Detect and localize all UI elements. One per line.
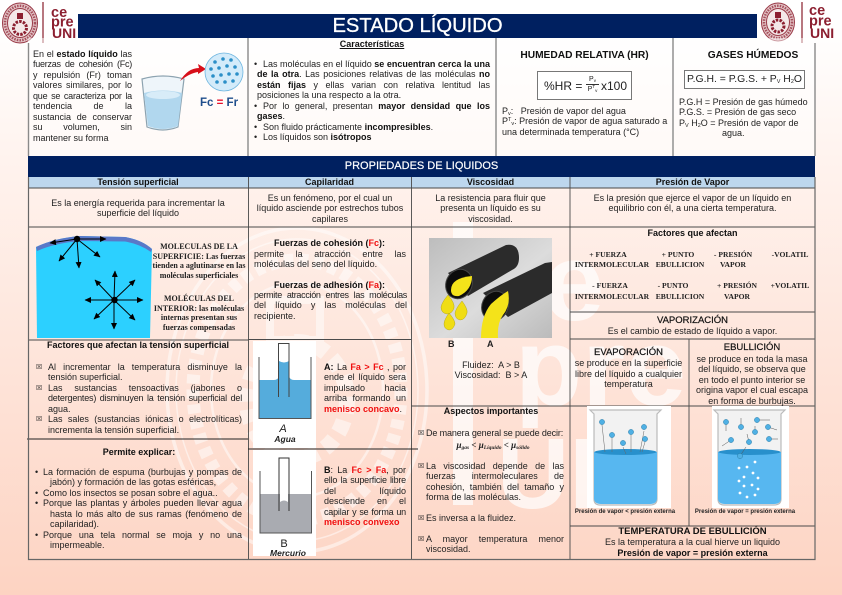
evaporación — [575, 346, 682, 389]
text: • — [254, 59, 257, 69]
list: permite explicar — [35, 467, 242, 550]
panel: humedad relativa — [502, 50, 668, 137]
text: • — [254, 101, 257, 111]
factors table: INTERMOLECULAR — [575, 292, 649, 301]
interior molecules note: INTERIOR: las moléculas — [154, 304, 244, 313]
fuerzas de adhesión text: del líquido y las moléculas del — [254, 300, 407, 310]
intro text: y repulsión (Fr) toman — [33, 70, 132, 80]
formula: HR: x100 — [601, 79, 627, 93]
viscosidad description: La resistencia para fluir que — [435, 193, 546, 203]
ebullición: se produce en toda la masa — [696, 354, 808, 364]
presión description: Es la presión que ejerce el vapor de un líquido en — [594, 193, 791, 203]
fluidez y viscosidad: Fluidez: A > B — [462, 360, 520, 370]
list: permite explicar: La formación de espuma (burbujas y pompas de — [43, 467, 242, 477]
bullet: viscosidad depende: ☒ — [418, 462, 424, 470]
fuerzas de adhesión text: permite atracción entres las moléculas — [254, 290, 407, 300]
temperatura de ebullición: Es la temperatura a la cual hierve un liquido — [605, 537, 780, 547]
evaporación: se produce en la superficie — [575, 358, 682, 368]
text: menisco convexo: capilar y se forma un — [324, 507, 406, 517]
list: permite explicar: hasta lo más alto de sus ramas (fenómeno de — [50, 509, 242, 519]
text: menisco convexo — [324, 465, 406, 527]
bullet: viscosidad depende: fuerzas intermoleculares de — [426, 471, 564, 481]
factors table — [575, 250, 809, 301]
capilaridad description: líquido asciende por estrechos tubos — [257, 203, 403, 213]
fuerzas de cohesión heading: Fuerzas de cohesión (Fc): — [274, 238, 385, 248]
factors table: INTERMOLECULAR — [575, 260, 649, 269]
interior molecules note — [154, 294, 244, 332]
col header: capilaridad: Capilaridad — [305, 177, 354, 187]
col header: viscosidad: Viscosidad — [467, 177, 514, 187]
surface molecules note: SUPERFICIE: Las fuerzas — [153, 252, 245, 261]
logo right: pre — [809, 14, 832, 30]
watermark: UNI — [497, 418, 669, 530]
list: características: posiciones la una respecto a la otra. — [257, 90, 401, 100]
label: A: A — [487, 339, 494, 349]
capilaridad description — [257, 193, 403, 224]
ebullición: origina vapor el cual escapa — [696, 385, 808, 395]
bullet: comparación: μgas < μLíquido < μsólido — [456, 440, 530, 451]
temperatura de ebullición — [605, 526, 780, 558]
fuerzas de adhesión text — [254, 290, 407, 321]
evaporación: EVAPORACIÓN — [594, 347, 663, 358]
panel: gases húmedos — [679, 48, 808, 138]
bullet: comparación: ☒ — [418, 429, 424, 437]
vaporización: Es el cambio de estado de líquido a vapor. — [608, 326, 777, 336]
list: factores tensión: Las sales (sustancias iónicas o electrolíticas) — [48, 414, 242, 424]
caption: boiling: Presión de vapor = presión externa — [695, 509, 795, 515]
list: características: Por lo general, presentan mayor densidad que los — [263, 101, 490, 111]
tensión description — [51, 198, 225, 218]
list: factores tensión: ☒ — [36, 415, 42, 423]
humedad definitions — [502, 106, 668, 137]
formula: HR — [537, 71, 632, 100]
intro text: su volumen, sin — [33, 122, 132, 132]
list: factores tensión: ☒ — [36, 384, 42, 392]
label: Fc = Fr: Fc = Fr — [200, 97, 238, 109]
list: características: Son fluido prácticamente incompresibles. — [263, 122, 433, 132]
logo right: UNI — [810, 25, 834, 41]
intro text: fuerzas de cohesión (Fc) — [33, 59, 132, 69]
fuerzas de cohesión text: permite la atracción entre las — [254, 249, 406, 259]
list: características: Las moléculas en el líquido se encuentran cerca la una — [263, 59, 490, 69]
factors table: - PUNTO — [658, 281, 688, 290]
factors table: +VOLATIL — [771, 281, 809, 290]
bullet: temperatura — [418, 534, 564, 554]
interior molecules note: internas presentan sus — [161, 313, 237, 322]
fluidez y viscosidad — [454, 360, 528, 380]
col header: tensión: Tensión superficial — [97, 177, 179, 187]
bullet: comparación: De manera general se puede decir: — [426, 428, 563, 438]
fuerzas de adhesión text: recipiente. — [254, 311, 296, 321]
list: permite explicar: capilaridad). — [50, 519, 99, 529]
caption: evaporation: Presión de vapor < presión externa — [575, 509, 675, 515]
heading: factores que afectan: Factores que afectan — [647, 228, 738, 238]
intro text: tendencia de la — [33, 101, 132, 111]
list: permite explicar: jabón) y formación de las gotas esféricas, — [50, 477, 216, 487]
watermark: pre — [515, 306, 686, 429]
list: características: de la otra. Las posiciones relativas de las moléculas no — [257, 69, 490, 79]
title bar: ESTADO LÍQUIDO — [332, 15, 503, 37]
factors table: + FUERZA — [589, 250, 627, 259]
list: permite explicar: Como los insectos se posan sobre el agua.. — [43, 488, 218, 498]
bullet: viscosidad depende: La viscosidad depende de las — [426, 461, 564, 471]
intro text — [33, 49, 132, 143]
formula: gases — [684, 70, 805, 89]
humedad definitions: una determinada temperatura (°C) — [502, 127, 639, 137]
evaporación: temperatura — [604, 379, 653, 389]
heading: permite explicar: Permite explicar: — [103, 447, 175, 457]
list: características — [254, 59, 490, 142]
logo left — [2, 2, 76, 44]
text: menisco convexo: del líquido — [324, 486, 406, 496]
gases definitions: P.G.H = Presión de gas húmedo — [679, 97, 808, 107]
factors table: + PRESIÓN — [717, 281, 757, 290]
temperatura de ebullición: Presión de vapor = presión externa — [617, 548, 768, 558]
bullet: inversa a la fluidez: Es inversa a la fluidez. — [426, 513, 516, 523]
ebullición: EBULLICIÓN — [724, 342, 780, 353]
ebullición: del líquido, se observa que — [698, 364, 806, 374]
factors table: - PRESIÓN — [714, 250, 752, 259]
logo left: pre — [51, 14, 74, 30]
intro text: valores similares, por lo — [33, 80, 132, 90]
text: • — [254, 132, 257, 142]
diagram: capillary water: A — [278, 423, 287, 435]
list: factores tensión: Al incrementar la temperatura disminuye la — [48, 362, 242, 372]
text: menisco concavo: menisco concavo. — [324, 404, 402, 414]
factors table: EBULLICION — [656, 292, 704, 301]
surface molecules note: MOLECULAS DE LA — [160, 242, 238, 251]
factors table: VAPOR — [724, 292, 750, 301]
text: menisco concavo — [324, 362, 406, 414]
ebullición: en todo el punto interior se — [699, 375, 805, 385]
list: características: Los líquidos son isótropos — [263, 132, 372, 142]
text: menisco concavo: arriba formando un — [324, 393, 406, 403]
gases definitions: PV H2O = Presión de vapor de — [679, 118, 799, 129]
humedad definitions: PT v: Presión de vapor de agua saturado a — [502, 116, 667, 127]
interior molecules note: fuerzas compensadas — [163, 323, 235, 332]
temperatura de ebullición: TEMPERATURA DE EBULLICIÓN — [618, 526, 767, 537]
formula: HR: %HR = — [544, 79, 582, 93]
logo right — [761, 2, 834, 43]
text: • — [254, 122, 257, 132]
heading: factores tensión: Factores que afectan la tensión superficial — [47, 340, 229, 350]
heading: humedad relativa: HUMEDAD RELATIVA (HR) — [520, 50, 649, 61]
intro text: mantener su forma — [33, 133, 109, 143]
factors table: EBULLICION — [656, 260, 704, 269]
list: factores tensión: ☒ — [36, 363, 42, 371]
intro text: sustancia de conservar — [33, 112, 132, 122]
bullet: viscosidad depende — [418, 461, 564, 502]
logo left: UNI — [52, 25, 76, 41]
presión description: equilibrio con él, a una cierta temperatura. — [608, 203, 777, 213]
formula: gases: P.G.H. = P.G.S. + PV H2O — [687, 74, 802, 85]
ebullición — [696, 342, 808, 406]
interior molecules note: MOLÉCULAS DEL — [164, 294, 234, 303]
ebullición: en forma de burbujas. — [708, 396, 796, 406]
list: factores tensión: Las sustancias tensoactivas (jabones o — [48, 383, 242, 393]
diagram: capillary water: Agua — [273, 434, 296, 444]
fluidez y viscosidad: Viscosidad: B > A — [455, 370, 527, 380]
evaporación: libre del líquido a cualquier — [575, 369, 682, 379]
text: menisco concavo: impulsado hacia — [324, 383, 406, 393]
fuerzas de cohesión text — [254, 249, 406, 269]
fuerzas de adhesión heading: Fuerzas de adhesión (Fa): — [274, 280, 385, 290]
icon: glass with molecules — [141, 52, 244, 131]
heading: gases húmedos: GASES HÚMEDOS — [708, 50, 798, 61]
humedad definitions: Pv: Presión de vapor del agua — [502, 106, 626, 117]
tensión description: Es la energía requerida para incrementar la — [51, 198, 225, 208]
bullet: temperatura: viscosidad. — [426, 544, 471, 554]
heading: Características: Características — [340, 39, 404, 49]
list: factores tensión: detergentes) disminuyen la tensión superficial del — [48, 393, 242, 403]
logo right: ce — [809, 3, 825, 19]
bullet: temperatura: A mayor temperatura menor — [426, 534, 564, 544]
viscosidad description — [435, 193, 546, 224]
diagram: capillary mercury: B — [280, 538, 288, 550]
gases definitions: agua. — [722, 128, 745, 138]
vaporización: VAPORIZACIÓN — [657, 315, 728, 326]
list: factores tensión: incrementa la tensión superficial. — [48, 425, 179, 435]
gases definitions — [679, 97, 808, 138]
formula: HR: Pv — [589, 76, 596, 83]
list: permite explicar: • — [35, 467, 38, 477]
gases definitions: P.G.S. = Presión de gas seco — [679, 107, 796, 117]
diagram: capillary mercury: Mercurio — [270, 548, 306, 558]
fuerzas de cohesión text: moléculas del seno del líquido. — [254, 259, 377, 269]
presión description — [594, 193, 791, 213]
list: permite explicar: • — [35, 530, 38, 540]
list: permite explicar: • — [35, 488, 38, 498]
col header: presión de vapor: Presión de Vapor — [656, 177, 729, 187]
surface molecules note: moléculas superficiales — [160, 271, 238, 280]
bullet: comparación — [418, 428, 563, 451]
factors table: -VOLATIL — [772, 250, 808, 259]
label: B: B — [448, 339, 454, 349]
text: menisco convexo: ello la superficie libre — [324, 475, 406, 485]
surface molecules note: tienden a aglutinarse en las — [153, 261, 245, 270]
logo left: ce — [51, 5, 67, 21]
intro text: que se caracteriza por la — [33, 91, 132, 101]
section bar: propiedades: PROPIEDADES DE LIQUIDOS — [345, 160, 498, 172]
vaporización — [608, 314, 777, 336]
text: menisco convexo: menisco convexo — [324, 517, 400, 527]
list: factores tensión — [36, 362, 242, 435]
list: factores tensión: tensión superficial. — [48, 372, 123, 382]
bullet: temperatura: ☒ — [418, 535, 424, 543]
capilaridad description: Es un fenómeno, por el cual un — [268, 193, 392, 203]
text: menisco concavo: A: La Fa > Fc , por — [324, 362, 406, 372]
list: permite explicar: Porque una tela normal se moja y no una — [43, 530, 242, 540]
viscosidad description: viscosidad. — [468, 214, 513, 224]
factors table: + PUNTO — [662, 250, 694, 259]
list: características: están fijas y ellas varian con relativa lentitud las — [257, 80, 490, 90]
text: menisco concavo: ende el líquido sera — [324, 372, 406, 382]
bullet: inversa a la fluidez: ☒ — [418, 514, 424, 522]
factors table: - FUERZA — [592, 281, 628, 290]
tensión description: superficie del líquido — [97, 208, 179, 218]
title bar — [78, 14, 757, 38]
text: menisco convexo: desciende en el — [324, 496, 406, 506]
intro text: En el estado líquido las — [33, 49, 132, 59]
heading: aspectos importantes: Aspectos importantes — [444, 406, 538, 416]
list: permite explicar: Porque las plantas y árboles pueden llevar agua — [43, 498, 242, 508]
factors table: VAPOR — [720, 260, 746, 269]
viscosidad description: presenta un líquido es su — [440, 203, 541, 213]
bullet: viscosidad depende: forma de las moléculas. — [426, 492, 521, 502]
list: permite explicar: • — [35, 498, 38, 508]
surface molecules note — [152, 242, 246, 280]
bullet: viscosidad depende: cohesión, también del tamaño y — [426, 482, 564, 492]
list: factores tensión: agua. — [48, 404, 71, 414]
text: menisco convexo: B: La Fc > Fa, por — [324, 465, 406, 475]
formula: HR: PT v — [588, 84, 597, 93]
watermark: ce — [482, 221, 604, 344]
list: permite explicar: impermeable. — [50, 540, 105, 550]
capilaridad description: capilares — [312, 214, 348, 224]
list: características: gases. — [257, 111, 285, 121]
